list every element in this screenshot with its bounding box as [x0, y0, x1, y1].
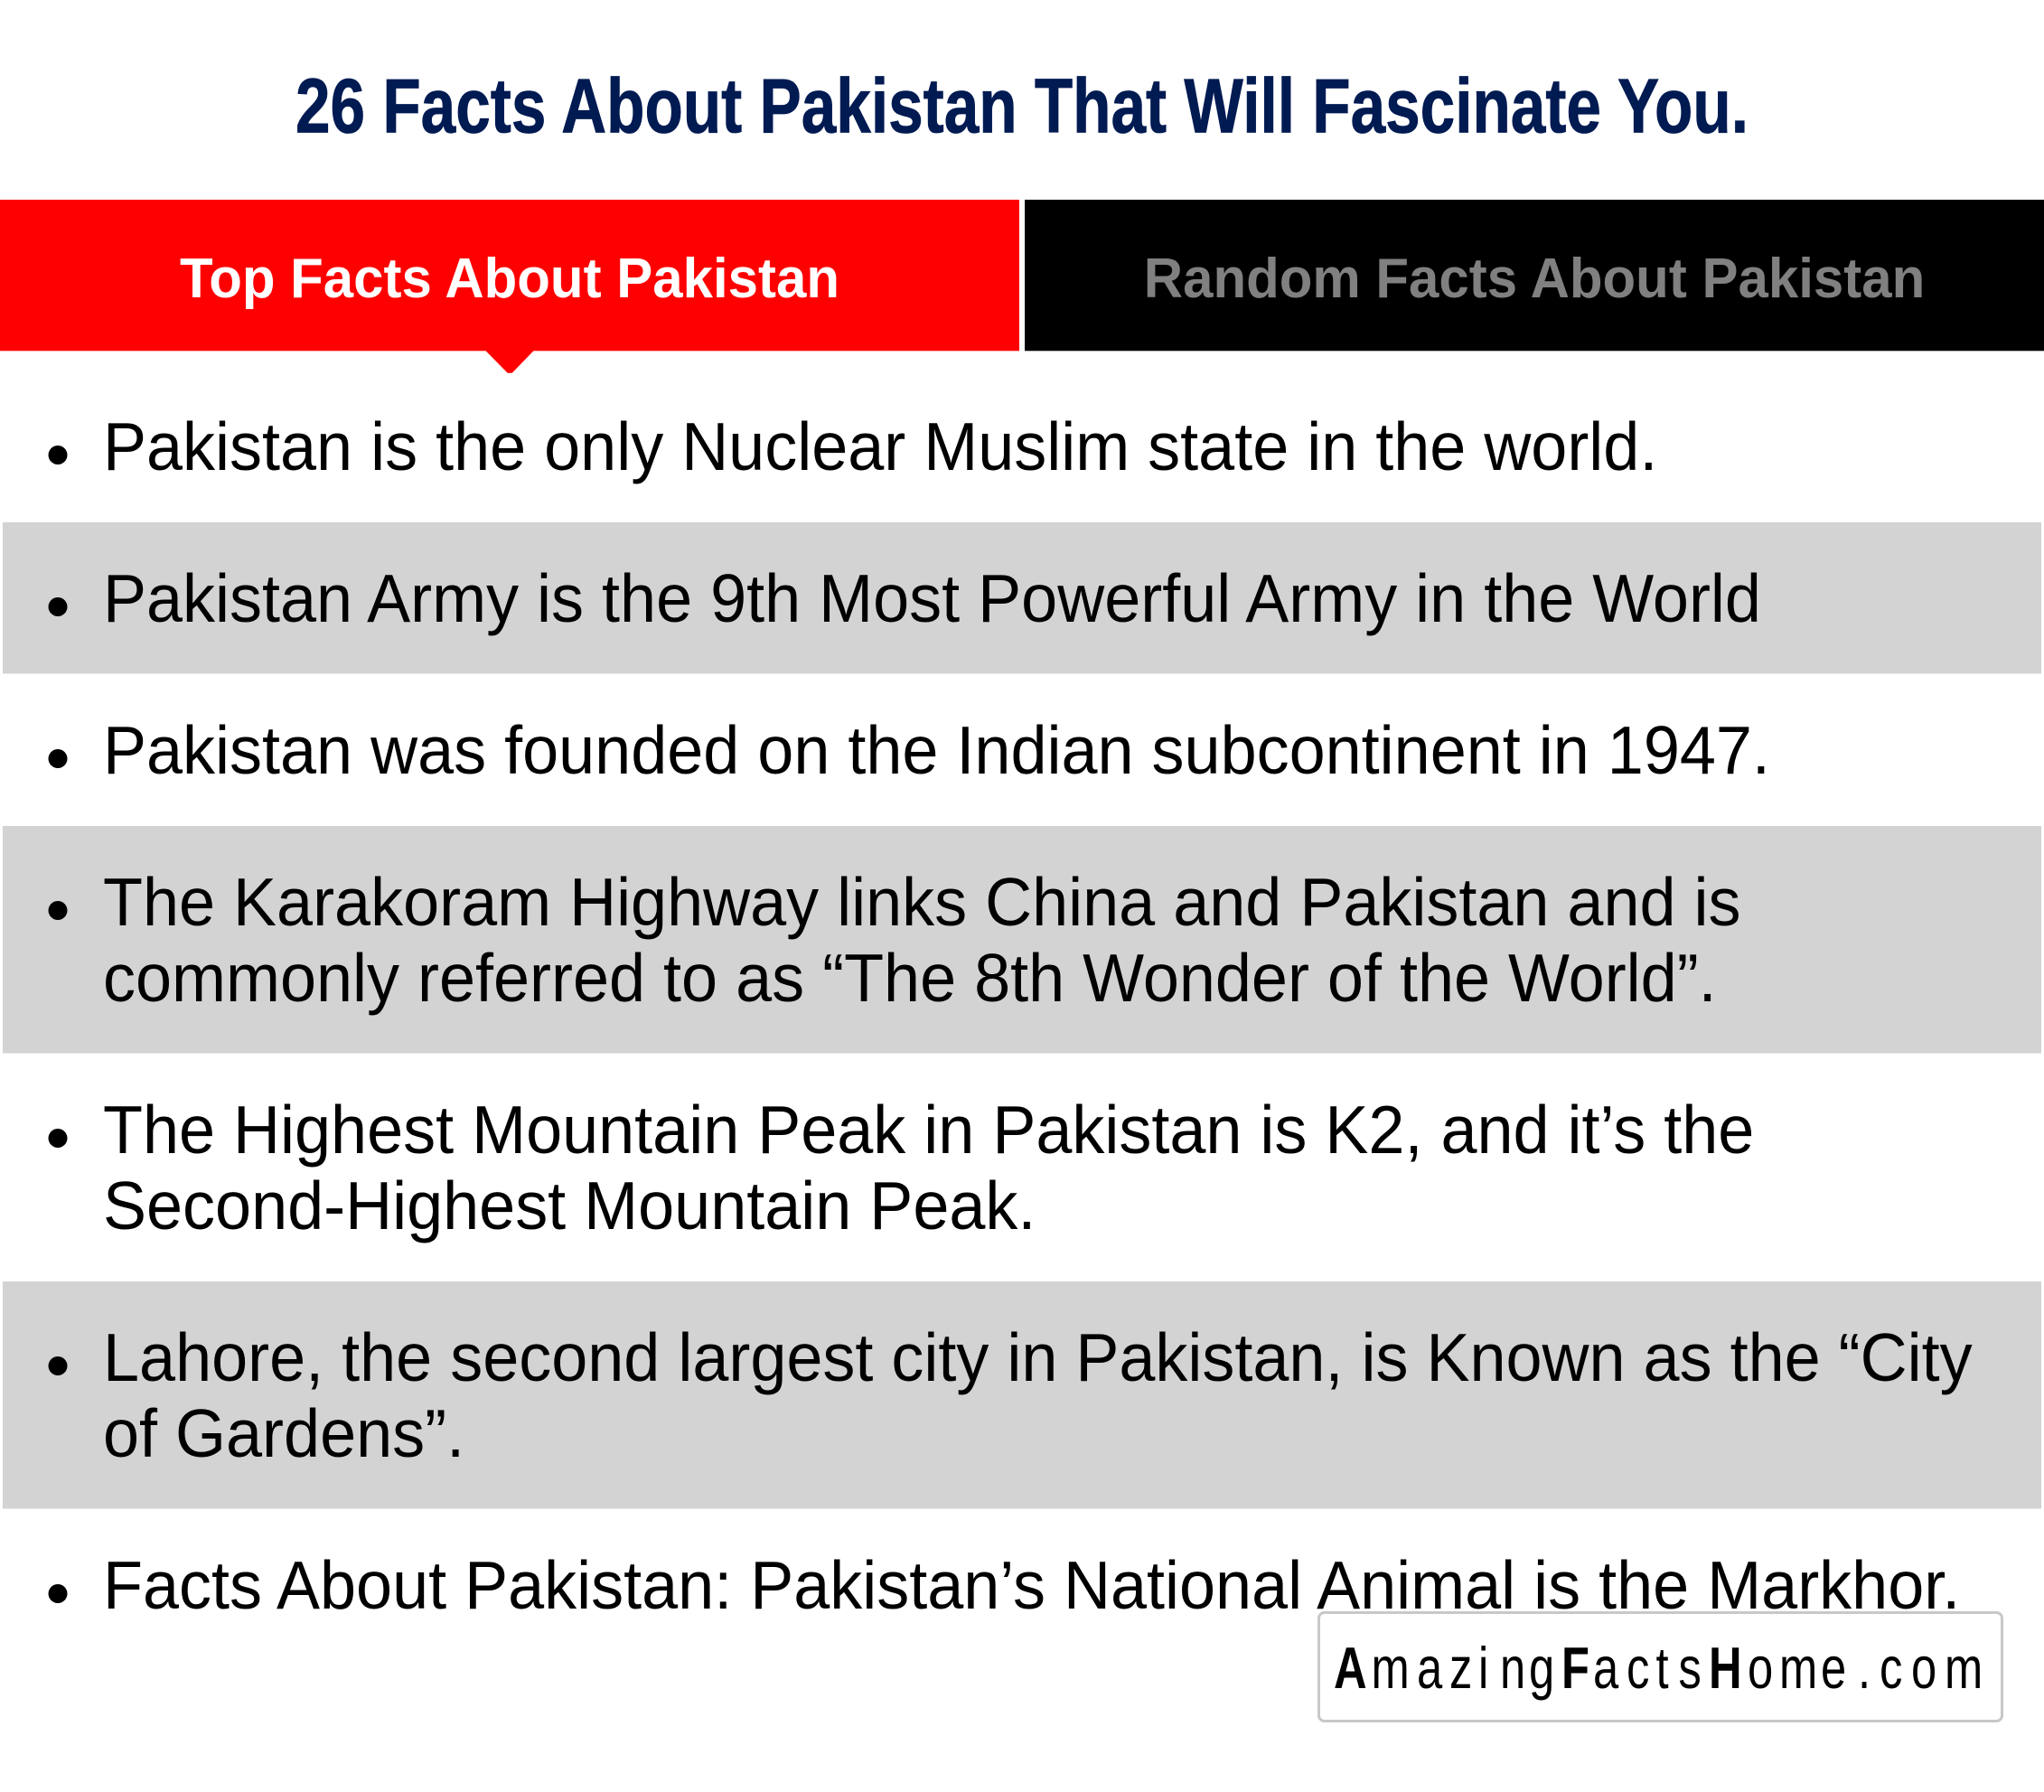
tab: random facts [1025, 200, 2044, 351]
tab: random facts: Random Facts About Pakistan [1144, 247, 1925, 309]
watermark badge: AmazingFactsHome.com [1334, 1636, 1983, 1701]
fact 4: The Karakoram Highway links China and Pakistan and is [103, 865, 1741, 940]
fact 4 [3, 826, 2041, 1054]
fact 2: Pakistan Army is the 9th Most Powerful Army in the World [103, 561, 1761, 636]
fact 2 [3, 522, 2041, 674]
fact 3: Pakistan was founded on the Indian subcontinent in 1947. [103, 713, 1770, 788]
title: 26 Facts About Pakistan That Will Fascinate You. [295, 64, 1749, 150]
tab: top facts (active): Top Facts About Pakistan [180, 247, 839, 309]
fact 5 [49, 1093, 1754, 1243]
tab: top facts (active) [0, 200, 1019, 373]
watermark badge [1319, 1612, 2002, 1721]
fact 5: The Highest Mountain Peak in Pakistan is K2, and it’s the [103, 1093, 1754, 1168]
fact 4: commonly referred to as “The 8th Wonder of the World”. [103, 941, 1717, 1016]
fact 6: of Gardens”. [103, 1396, 464, 1471]
fact 5: Second-Highest Mountain Peak. [103, 1168, 1036, 1243]
fact 7: Facts About Pakistan: Pakistan’s National Animal is the Markhor. [103, 1548, 1960, 1623]
fact 1: Pakistan is the only Nuclear Muslim state in the world. [103, 409, 1657, 484]
fact 6 [3, 1281, 2041, 1509]
fact 6: Lahore, the second largest city in Pakistan, is Known as the “City [103, 1320, 1973, 1395]
